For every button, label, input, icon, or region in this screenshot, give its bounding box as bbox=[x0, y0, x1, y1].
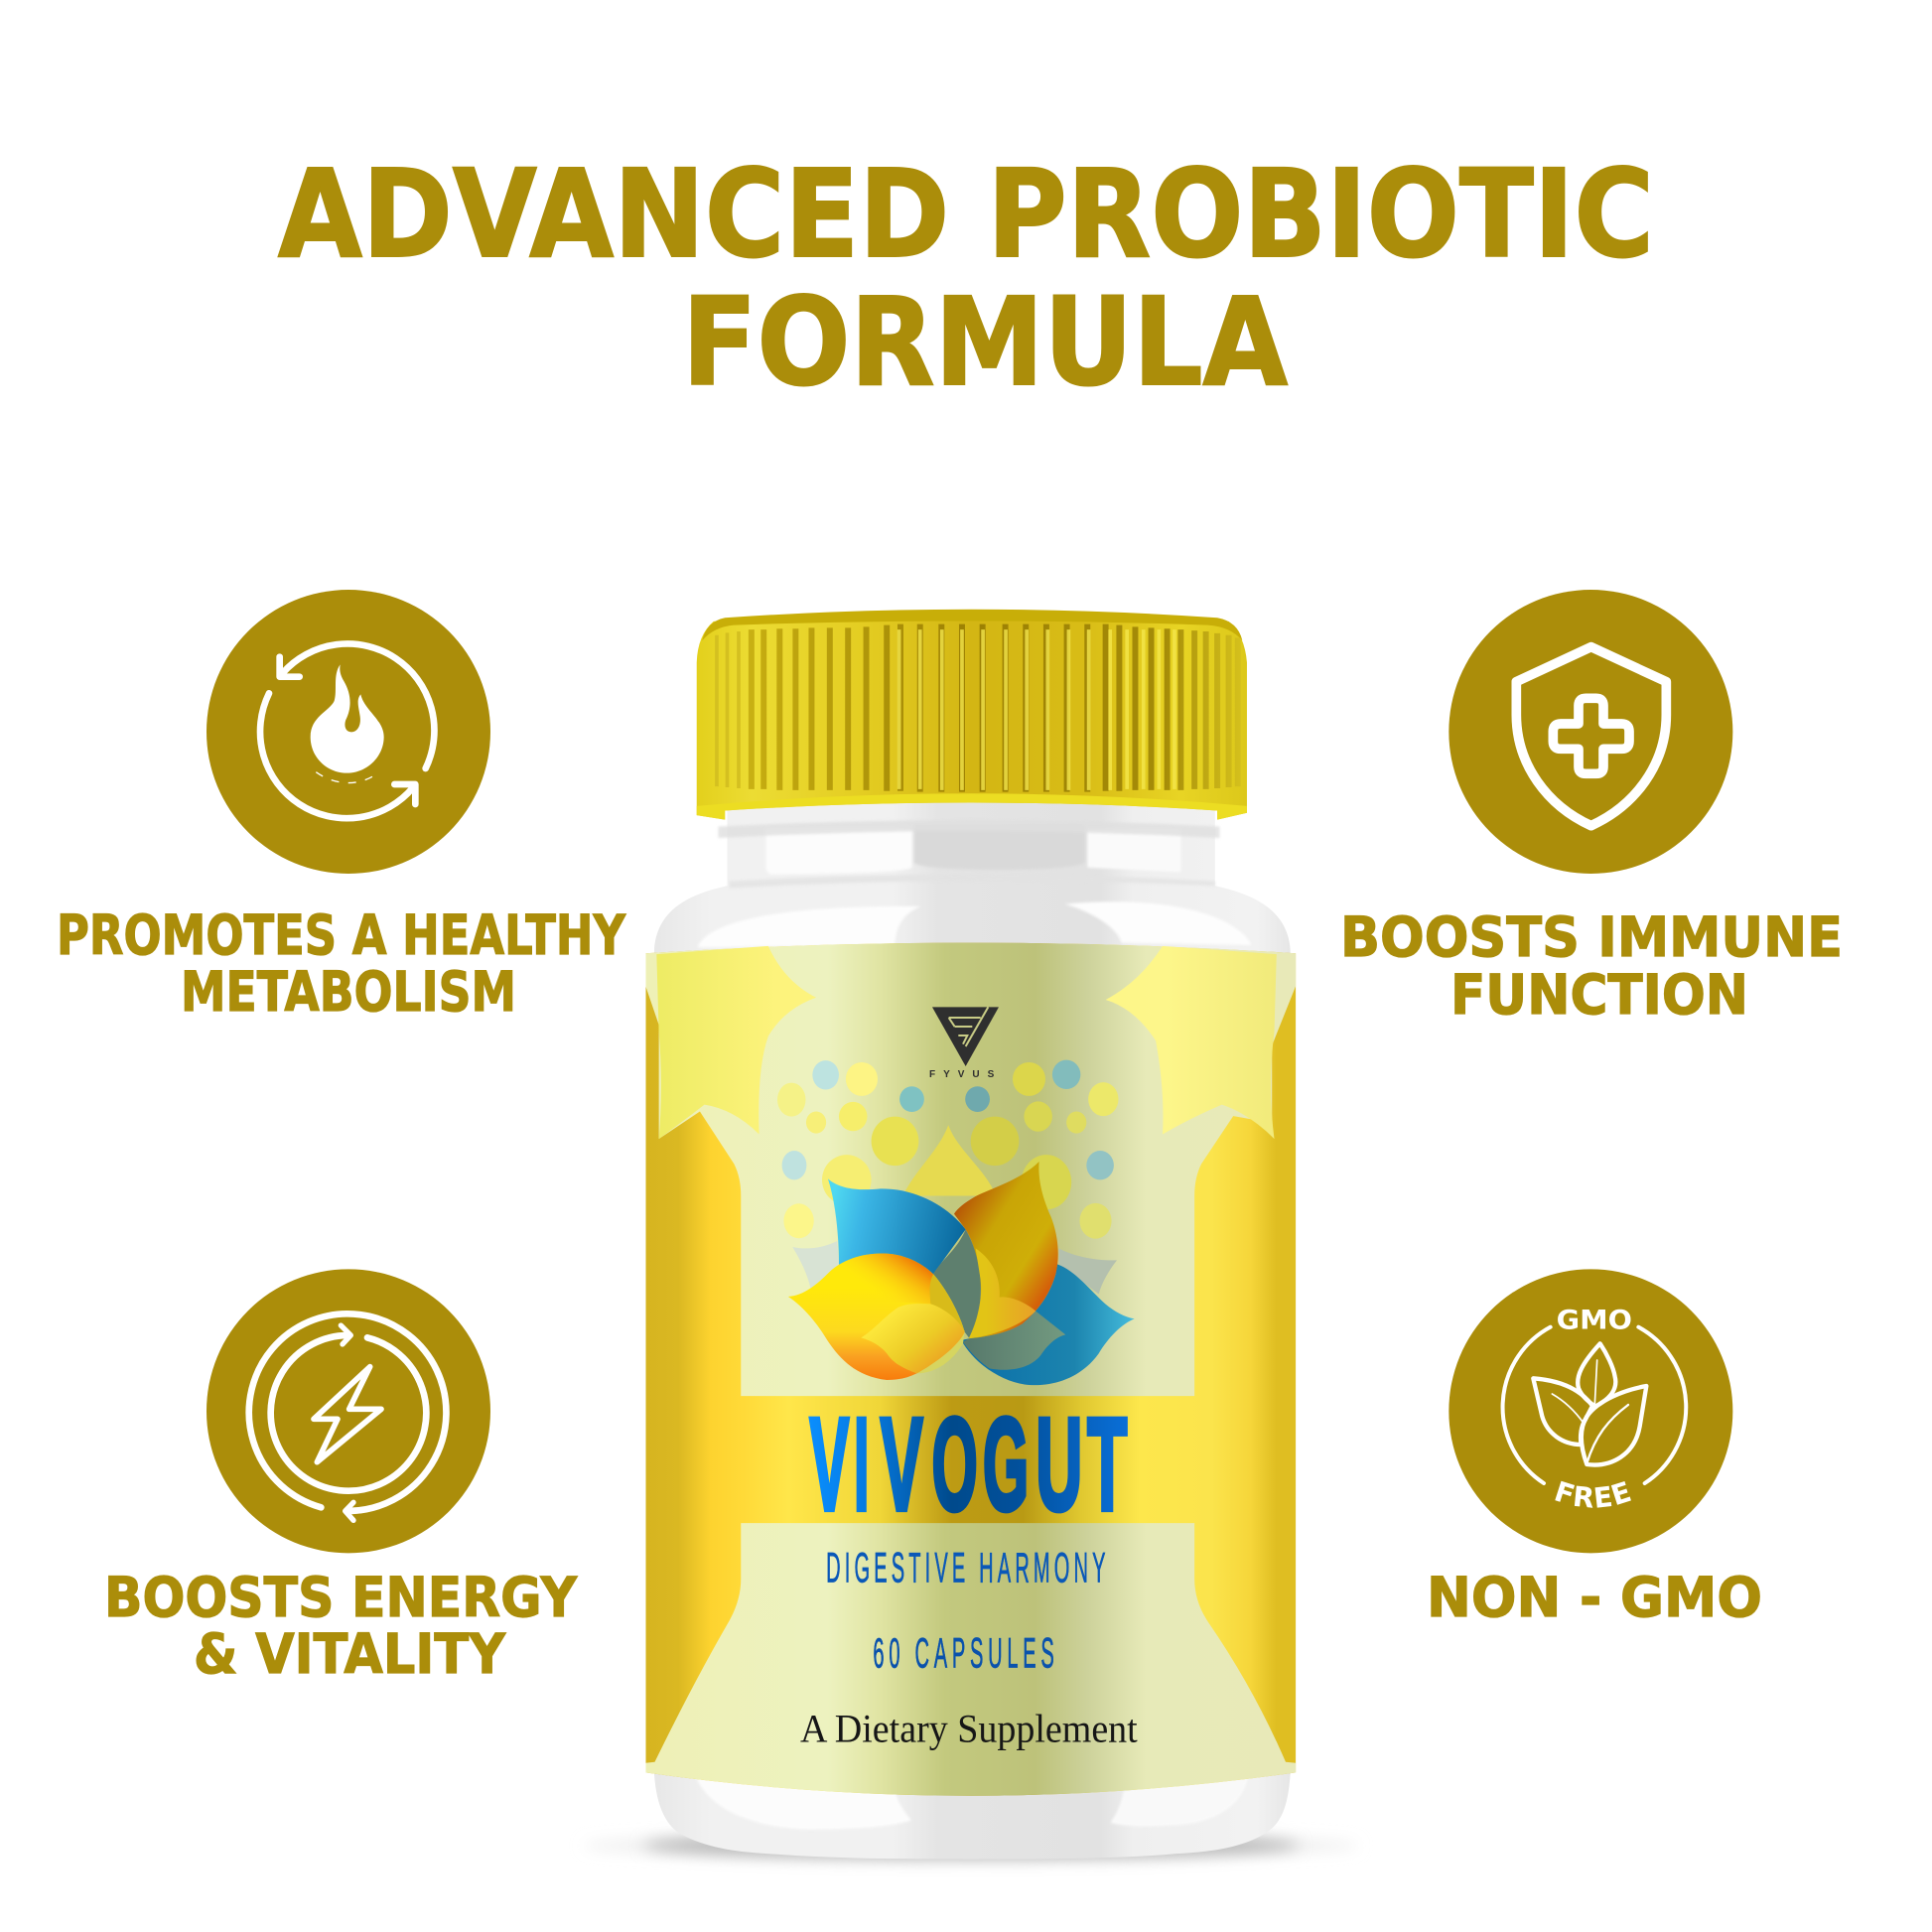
product label: T bbox=[1087, 1391, 1127, 1538]
brand logo bbox=[929, 1007, 1002, 1080]
leaf overlap left bbox=[933, 1229, 981, 1338]
title bbox=[278, 144, 1654, 413]
top blue leaf bbox=[828, 1178, 966, 1274]
left leaf orange top bbox=[829, 1253, 933, 1304]
brand name: V bbox=[810, 1391, 849, 1538]
label: promotes a healthy metabolism: PROMOTES A HEALTHY bbox=[57, 903, 626, 967]
lotus behind bbox=[902, 1125, 996, 1195]
label: boosts energy and vitality bbox=[104, 1566, 578, 1686]
panel: energy benefit bbox=[104, 1269, 578, 1686]
product label bbox=[645, 943, 1296, 1796]
brand name: O bbox=[932, 1391, 978, 1538]
top gold leaf bbox=[954, 1162, 1058, 1338]
label: boosts immune function: FUNCTION bbox=[1450, 963, 1748, 1027]
panel: metabolism benefit bbox=[57, 590, 626, 1024]
label: boosts energy and vitality: BOOSTS ENERGY bbox=[104, 1566, 578, 1629]
panel: non-GMO benefit bbox=[1427, 1269, 1762, 1629]
brand logo: FYVUS bbox=[929, 1069, 1002, 1080]
brand name: U bbox=[1035, 1391, 1082, 1538]
icon: GMO free leaves: FREE bbox=[1555, 1481, 1631, 1508]
icon: GMO free leaves: GMO bbox=[1557, 1305, 1632, 1335]
supplement line: A Dietary Supplement bbox=[800, 1707, 1138, 1751]
label: promotes a healthy metabolism: METABOLISM bbox=[181, 960, 516, 1024]
bottle body bbox=[654, 799, 1291, 1860]
brand name: V bbox=[881, 1391, 922, 1538]
label gold base bbox=[645, 943, 1296, 1796]
left leaf tone bbox=[930, 1274, 965, 1332]
label pale upper panel bbox=[645, 943, 1296, 1396]
icon: shield with cross bbox=[1449, 590, 1732, 874]
under petal bbox=[916, 1330, 965, 1373]
label pale lower panel bbox=[645, 1523, 1296, 1796]
capsule count: 60 CAPSULES bbox=[873, 1630, 1054, 1678]
panel: immune benefit bbox=[1340, 590, 1843, 1027]
right blue leaf bbox=[961, 1264, 1135, 1385]
label: boosts immune function bbox=[1340, 905, 1843, 1027]
right sprout bbox=[969, 1248, 1035, 1338]
bottle bbox=[584, 610, 1358, 1860]
tagline: DIGESTIVE HARMONY bbox=[826, 1545, 1106, 1592]
icon: bolt in cycle rings bbox=[207, 1269, 490, 1553]
brand name: I bbox=[854, 1391, 869, 1538]
right petal bbox=[1106, 946, 1277, 1139]
icon: GMO free leaves bbox=[1449, 1269, 1733, 1553]
floor shadow bbox=[584, 1832, 1358, 1860]
bubbles bbox=[777, 1060, 1118, 1239]
left yellow leaf bbox=[788, 1253, 965, 1380]
flower emblem bbox=[788, 1162, 1135, 1385]
label: boosts immune function: BOOSTS IMMUNE bbox=[1340, 905, 1843, 969]
grey petals behind bbox=[792, 1241, 839, 1289]
label: boosts energy and vitality: & VITALITY bbox=[194, 1622, 506, 1686]
left petal bbox=[656, 946, 816, 1139]
icon: flame in cycle arrows bbox=[207, 590, 490, 874]
leaf overlap right bbox=[963, 1311, 1065, 1370]
title: FORMULA bbox=[682, 272, 1288, 413]
left sprout bbox=[861, 1304, 965, 1373]
label: non-GMO: NON - GMO bbox=[1427, 1566, 1762, 1629]
bottle cap bbox=[697, 610, 1247, 820]
brand name: G bbox=[983, 1391, 1029, 1538]
label: promotes a healthy metabolism bbox=[57, 903, 626, 1024]
title: ADVANCED PROBIOTIC bbox=[278, 144, 1654, 285]
